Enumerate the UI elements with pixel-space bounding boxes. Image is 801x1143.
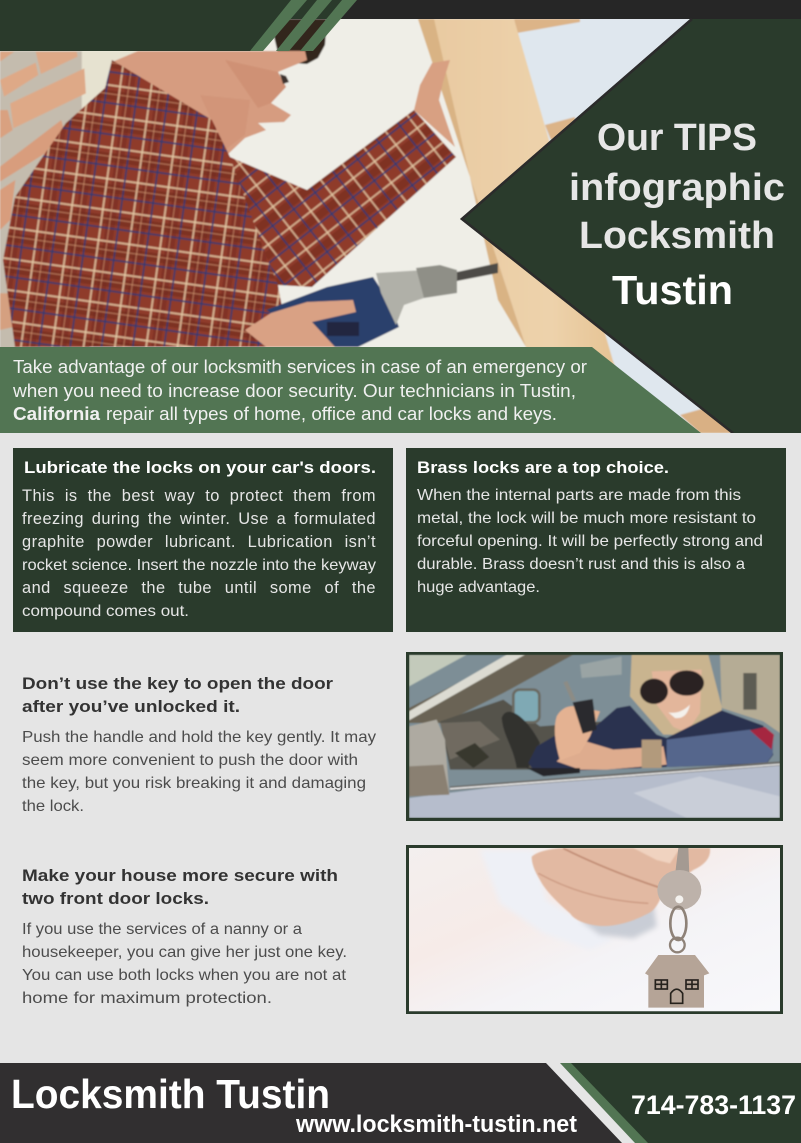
panel: lubricate the locks: Lubricate the locks on your car's doors. [24, 458, 376, 477]
panel: lubricate the locks: graphite powder lubricant. Lubrication isn’t [22, 533, 376, 551]
text block: don't use the key: seem more convenient to push the door with [22, 752, 358, 769]
panel: lubricate the locks: and squeeze the tube until some of the [22, 579, 376, 597]
green stripes [250, 0, 357, 51]
title: infographic [569, 167, 785, 209]
text block: two front door locks: Make your house more secure with [22, 866, 338, 885]
footer brand name: Locksmith Tustin [11, 1071, 330, 1117]
panel: lubricate the locks: This is the best way to protect them from [22, 487, 376, 505]
drill [266, 277, 399, 347]
hero banner [0, 0, 801, 433]
intro text: Take advantage of our locksmith services in case of an emergency or [13, 357, 587, 377]
photo: hand holding house key [406, 845, 783, 1014]
intro text: repair all types of home, office and car locks and keys. [106, 404, 557, 424]
text block: don't use the key: Push the handle and hold the key gently. It may [22, 729, 376, 746]
text block: two front door locks: two front door locks. [22, 889, 209, 908]
panel: brass locks: huge advantage. [417, 579, 540, 596]
text block: two front door locks [22, 866, 347, 1007]
text block: don't use the key: Don’t use the key to open the door [22, 674, 333, 693]
title: Locksmith [579, 215, 775, 257]
panel: lubricate the locks: freezing during the winter. Use a formulated [22, 510, 376, 528]
text block: two front door locks: home for maximum protection. [22, 990, 272, 1007]
title [569, 117, 785, 313]
text block: don't use the key [22, 674, 376, 815]
top dark green band [0, 0, 294, 51]
panel: brass locks: Brass locks are a top choice. [417, 458, 669, 477]
footer phone number: 714-783-1137 [631, 1090, 796, 1120]
panel: brass locks: durable. Brass doesn’t rust and this is also a [417, 556, 745, 573]
intro band [0, 347, 701, 433]
panel: brass locks: When the internal parts are made from this [417, 487, 741, 504]
text block: don't use the key: the key, but you risk breaking it and damaging [22, 775, 366, 792]
panel: brass locks [406, 448, 786, 632]
text block: two front door locks: If you use the services of a nanny or a [22, 921, 302, 938]
shirt [3, 60, 300, 347]
photo: woman in car holding key [406, 652, 783, 821]
hand on drill [245, 300, 356, 347]
top black bar [335, 0, 801, 19]
panel: brass locks: forceful opening. It will be perfectly strong and [417, 533, 763, 550]
brick wall [0, 51, 143, 351]
panel: lubricate the locks: compound comes out. [22, 603, 189, 620]
title: Our TIPS [597, 117, 757, 159]
head [112, 51, 307, 157]
right title panel [460, 19, 801, 433]
text block: don't use the key: the lock. [22, 798, 84, 815]
text block: two front door locks: housekeeper, you can give her just one key. [22, 944, 347, 961]
footer website: www.locksmith-tustin.net [295, 1111, 577, 1138]
intro text: California [13, 404, 101, 424]
hair [270, 19, 327, 64]
footer bar [0, 1063, 801, 1143]
panel: brass locks: metal, the lock will be much more resistant to [417, 510, 756, 527]
hand on plank [414, 60, 455, 147]
intro text: when you need to increase door security. Our technicians in Tustin, [12, 381, 576, 401]
panel: lubricate the locks: rocket science. Insert the nozzle into the keyway [22, 557, 376, 574]
text block: don't use the key: after you’ve unlocked it. [22, 697, 240, 716]
hero photo: man drilling a door [0, 19, 801, 433]
panel: lubricate the locks [13, 448, 393, 632]
intro text [12, 357, 587, 424]
sleeve [230, 110, 456, 287]
title: Tustin [612, 267, 733, 313]
text block: two front door locks: You can use both locks when you are not at [22, 967, 347, 984]
